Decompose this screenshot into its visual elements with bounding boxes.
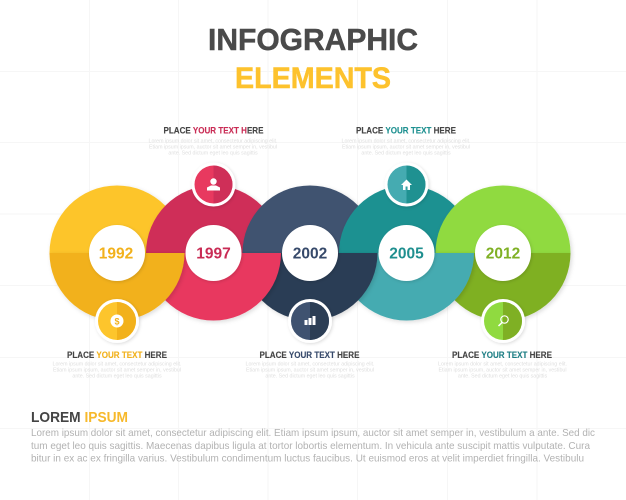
description: Lorem ipsum dolor sit amet, consectetur adipiscing elit.: [53, 362, 181, 368]
top half: 2012 green: [436, 185, 570, 253]
icon: house: [384, 162, 428, 206]
description: [342, 138, 470, 156]
description: ante. Sed dictum eget leo quis sagittis: [168, 150, 258, 156]
icon: dollar coin: [95, 299, 139, 343]
year badge: 2002: [282, 225, 338, 281]
icon: dollar coin: $: [114, 316, 120, 326]
lorem ipsum paragraph: bitur in ex ac ex fringilla varius. Vestibulum condimentum luctus faucibus. Ut euismod eros at velit imperdiet fringilla. Vestibulu: [31, 452, 584, 464]
bottom callout: 2002 text: [246, 350, 374, 380]
top callout: 2005 text: [342, 126, 470, 156]
top half: 1997 red: [146, 185, 281, 253]
bottom half: 1992 yellow: [50, 253, 184, 320]
heading: PLACE YOUR TEXT HERE: [67, 350, 167, 360]
description: [438, 362, 567, 380]
top half: 2005 teal: [339, 185, 474, 253]
lorem ipsum heading: LOREM IPSUM: [31, 409, 128, 426]
description: Lorem ipsum dolor sit amet, consectetur adipiscing elit.: [246, 362, 374, 368]
year badge: 1992: 1992: [99, 246, 133, 262]
description: Lorem ipsum dolor sit amet, consectetur adipiscing elit.: [149, 138, 277, 144]
description: Etiam ipsum ipsum, auctor sit amet semper in, vestibul: [149, 144, 277, 150]
year badge: 2002: 2002: [293, 246, 327, 262]
bottom half: 2002 navy: [242, 253, 378, 320]
top half: 2002 navy: [242, 185, 378, 253]
lorem ipsum paragraph: tum eget leo quis sagittis. Maecenas dapibus ligula at tortor lobortis elementum. In vehicula ante suscipit mattis vulputate. Cura: [31, 440, 590, 452]
year badge: 1992: [89, 225, 145, 281]
bottom half: 1997 red: [146, 253, 281, 320]
title line: elements: ELEMENTS: [235, 62, 391, 95]
description: Lorem ipsum dolor sit amet, consectetur adipiscing elit.: [438, 362, 567, 368]
description: [149, 138, 277, 156]
lorem ipsum paragraph: Lorem ipsum dolor sit amet, consectetur adipiscing elit. Etiam ipsum ipsum, auctor sit amet semper in, vestibulum a ante. Sed dic: [31, 427, 595, 439]
title line: infographic: INFOGRAPHIC: [208, 22, 418, 57]
bottom half: 2005 teal: [339, 253, 474, 320]
heading: PLACE YOUR TEXT HERE: [452, 350, 552, 360]
description: Lorem ipsum dolor sit amet, consectetur adipiscing elit.: [342, 138, 470, 144]
description: Etiam ipsum ipsum, auctor sit amet semper in, vestibul: [342, 144, 470, 150]
icon: person: [192, 162, 236, 206]
icon: bar chart: [288, 299, 332, 343]
top callout: 1997 text: [149, 126, 277, 156]
description: [246, 362, 374, 380]
heading: PLACE YOUR TEXT HERE: [164, 126, 264, 136]
description: ante. Sed dictum eget leo quis sagittis: [361, 150, 451, 156]
description: ante. Sed dictum eget leo quis sagittis: [265, 374, 355, 380]
description: ante. Sed dictum eget leo quis sagittis: [72, 374, 162, 380]
year badge: 2005: 2005: [389, 246, 424, 262]
heading: PLACE YOUR TEXT HERE: [356, 126, 456, 136]
bottom callout: 2012 text: [438, 350, 567, 380]
description: ante. Sed dictum eget leo quis sagittis: [458, 374, 547, 380]
icon: magnifier: [481, 299, 525, 343]
year badge: 2005: [378, 225, 434, 281]
description: Etiam ipsum ipsum, auctor sit amet semper in, vestibul: [438, 368, 567, 374]
description: [53, 362, 181, 380]
heading: PLACE YOUR TEXT HERE: [260, 350, 360, 360]
title: [208, 22, 418, 95]
bottom callout: 1992 text: [53, 350, 181, 380]
description: Etiam ipsum ipsum, auctor sit amet semper in, vestibul: [246, 368, 374, 374]
year badge: 2012: [475, 225, 531, 281]
year badge: 1997: 1997: [196, 246, 231, 262]
top half: 1992 yellow: [50, 185, 184, 253]
lorem ipsum paragraph: [31, 427, 595, 464]
timeline chain of circles: [50, 185, 570, 320]
year badge: 1997: [186, 225, 242, 281]
bottom half: 2012 green: [436, 253, 570, 320]
description: Etiam ipsum ipsum, auctor sit amet semper in, vestibul: [53, 368, 181, 374]
year badge: 2012: 2012: [486, 246, 520, 262]
